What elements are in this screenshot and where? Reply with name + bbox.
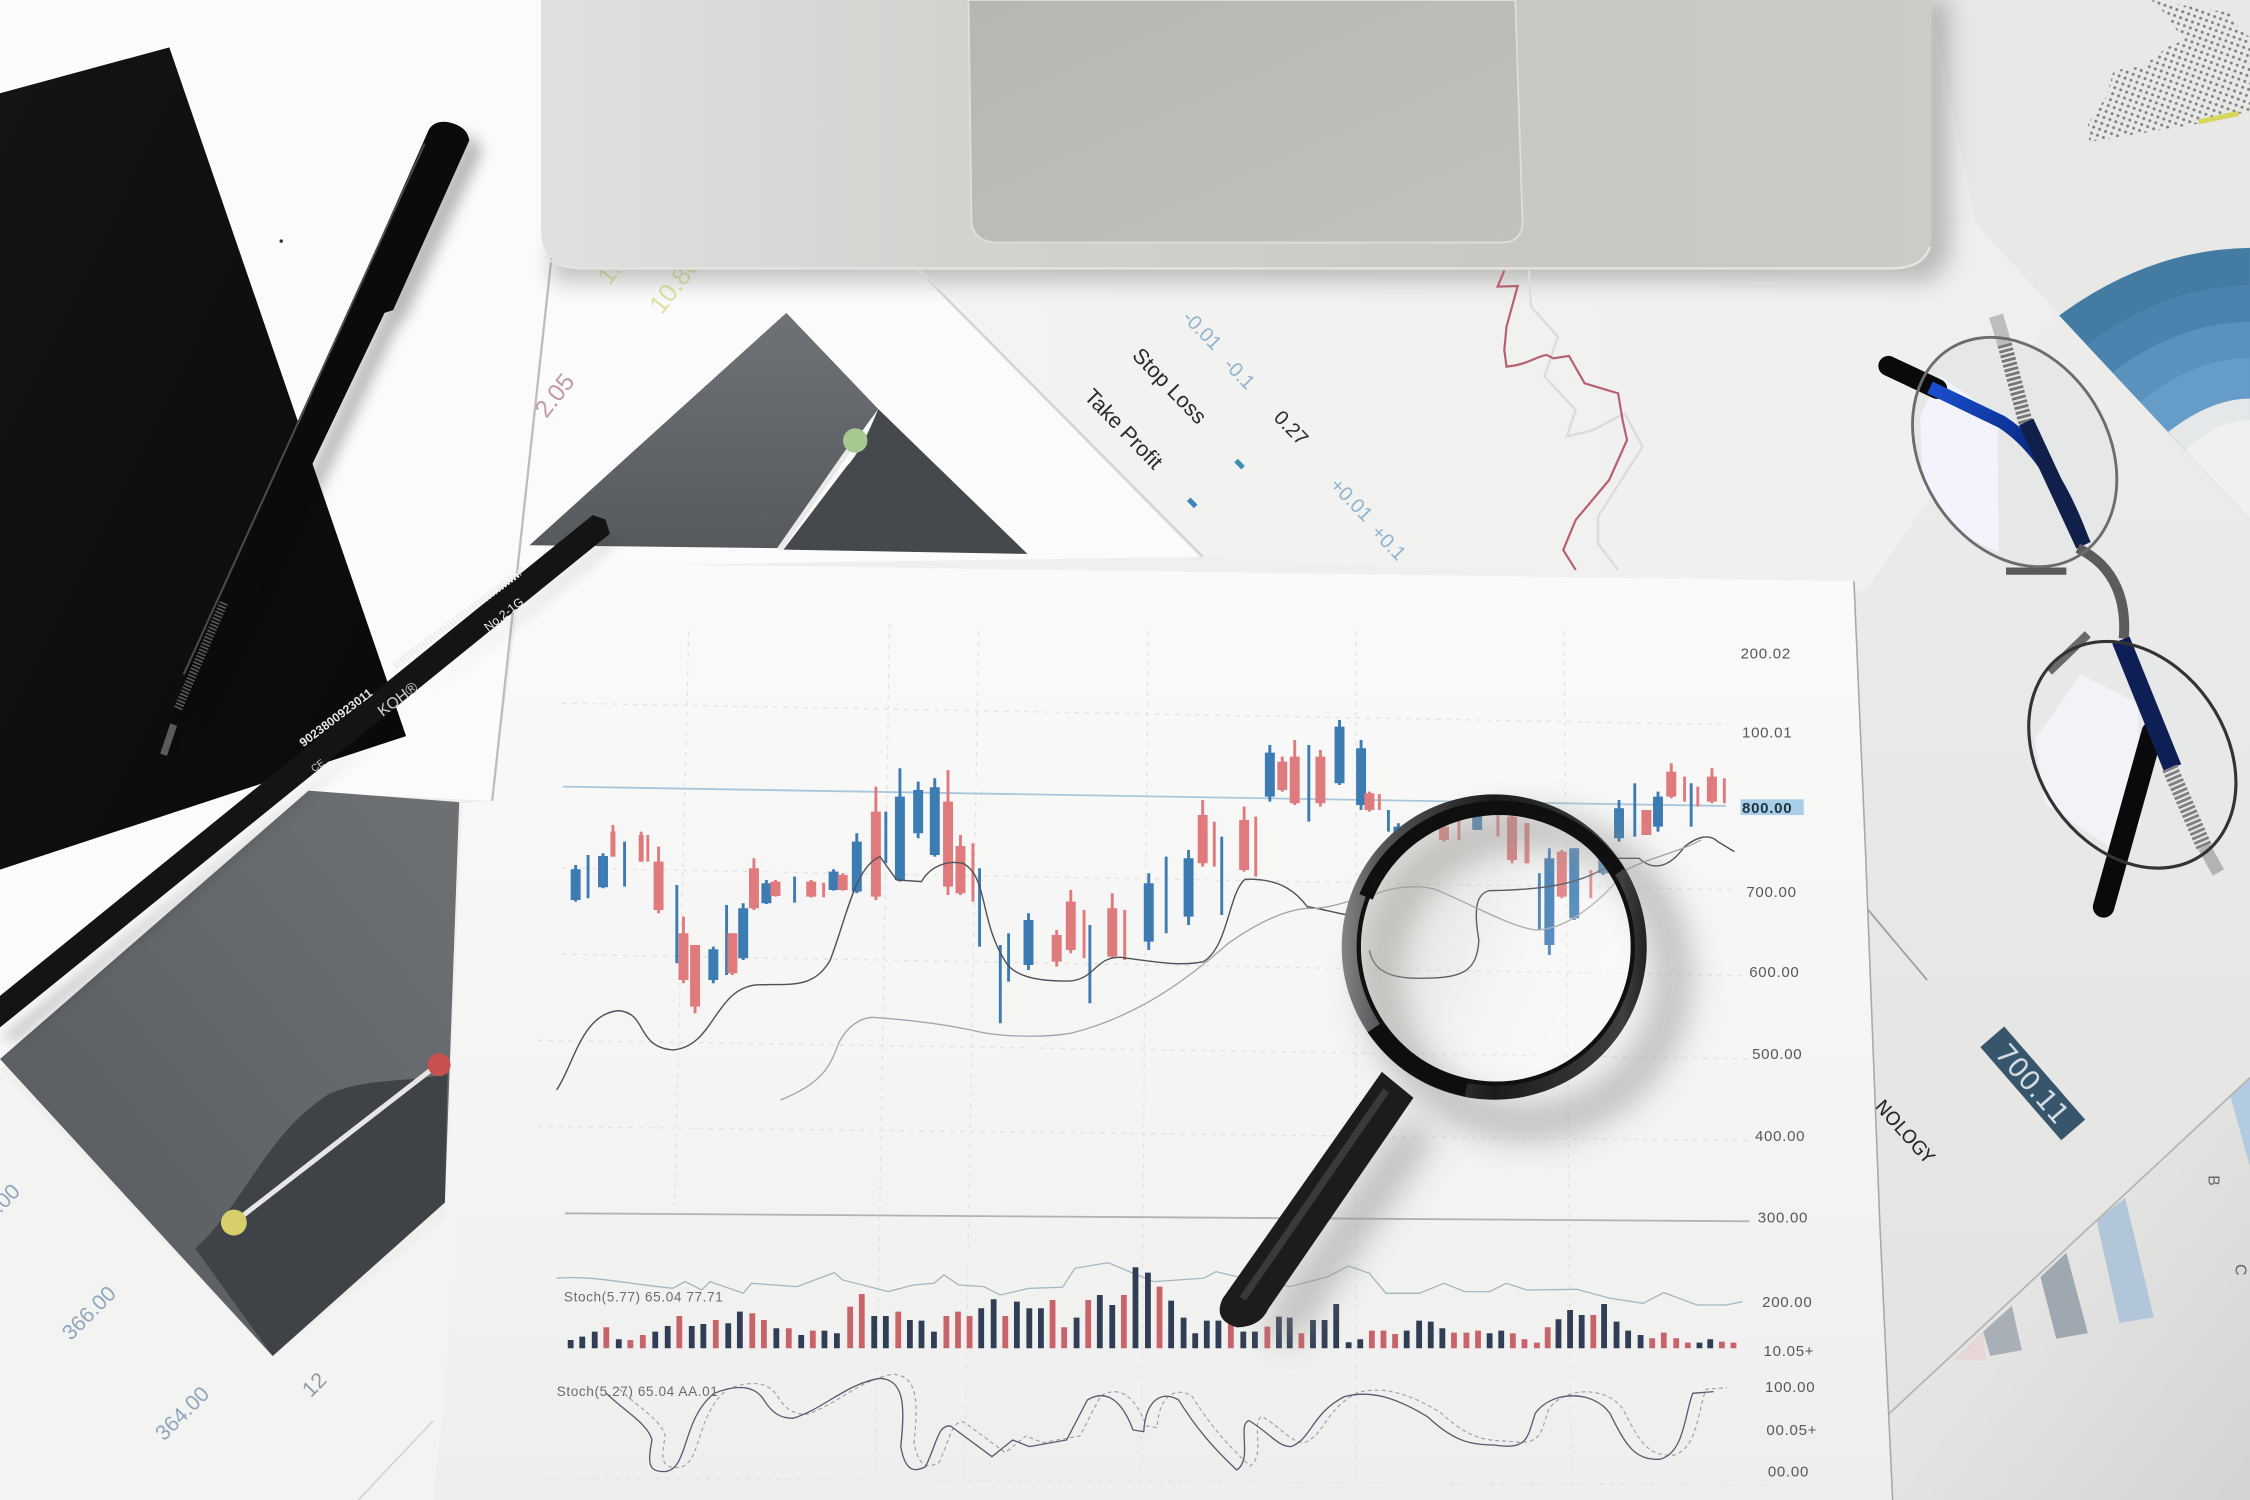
bars on lower right sheet: B: [2204, 1175, 2221, 1186]
lens bottom reflection: [2035, 674, 2141, 847]
pen: [159, 122, 482, 761]
pencil: [0, 515, 617, 1040]
resistance line: [563, 787, 1726, 806]
price axis labels: [1741, 646, 1817, 1481]
lower left sheet: 364.00: [151, 1382, 214, 1445]
price axis labels: 500.00: [1752, 1046, 1802, 1063]
red wicks: [613, 740, 1724, 1013]
ring base: [1342, 794, 1647, 1100]
decorative numbers near triangle: 2.05: [530, 369, 580, 423]
laptop: [541, 0, 1931, 270]
stop loss panel: +0.01: [1325, 474, 1376, 526]
price axis labels: 200.00: [1762, 1294, 1812, 1311]
price axis labels: 300.00: [1758, 1210, 1808, 1227]
price axis labels: 100.01: [1742, 725, 1792, 742]
pencil: No.2-1G: [481, 595, 526, 634]
pencil: 9023800923011: [297, 686, 375, 750]
decorative numbers near triangle: 1.1: [593, 246, 635, 290]
trackpad: [969, 0, 1522, 243]
decorative numbers near triangle: [530, 246, 706, 423]
label: 700.11: 700.11: [1989, 1038, 2075, 1131]
right temple: [1996, 316, 2005, 344]
black notebook: [0, 47, 406, 870]
price axis labels: 10.05+: [1764, 1343, 1814, 1360]
eyeglasses: [1871, 299, 2250, 908]
chart sheet: [433, 563, 1893, 1500]
paper: upper left sheet: [0, 0, 552, 1069]
price axis labels: 00.05+: [1766, 1422, 1817, 1439]
paper: lower right sheet: [1865, 1004, 2250, 1500]
stochastic solid: [606, 1378, 1714, 1472]
paper: stop loss sheet: [918, 224, 2056, 591]
stop loss panel: +0.1: [1367, 521, 1410, 565]
magnifier shadow: [1277, 829, 1673, 1335]
pencil: KOH®: [375, 679, 422, 720]
price axis labels: 600.00: [1749, 964, 1800, 981]
price axis labels: 700.00: [1746, 884, 1797, 901]
lens bottom: [1986, 601, 2250, 908]
stop loss panel: -0.1: [1219, 354, 1259, 394]
stop loss panel: [918, 270, 1410, 565]
collar: [1375, 1027, 1467, 1088]
dot pattern: [2088, 0, 2250, 142]
bars on lower right sheet: [1953, 1078, 2250, 1360]
blue wicks: [576, 720, 1691, 1023]
label: 700.11: [1979, 1026, 2085, 1141]
volume bars red: [606, 1287, 1733, 1348]
frames: [1871, 299, 2158, 605]
stoch label 1: Stoch(5.77) 65.04 77.71: [564, 1290, 723, 1305]
arcs: [2059, 248, 2250, 520]
handle: [1220, 1072, 1413, 1327]
hinge: [2078, 548, 2124, 639]
stop loss panel: -0.01: [1178, 307, 1225, 355]
moving average light: [780, 840, 1701, 1100]
lens top: [1871, 299, 2158, 605]
price axis labels: 00.00: [1768, 1464, 1809, 1481]
lower temple black: [2104, 732, 2152, 907]
paper: right sheet: [1851, 0, 2250, 1414]
yellow accent: [2198, 113, 2239, 122]
price axis labels: 100.00: [1765, 1379, 1815, 1396]
red bodies: [659, 757, 1712, 1007]
inner rim: [1359, 810, 1633, 1084]
dark triangle shape: [529, 313, 1027, 554]
magnifier: [1220, 794, 1647, 1327]
dark polygon shape lower left: [0, 791, 459, 1356]
laptop shadow: [552, 0, 1950, 281]
text: technology fragment: NOLOGY: [1870, 1096, 1938, 1169]
black top arc: [1366, 808, 1619, 897]
decorative numbers near triangle: 10.80: [644, 251, 706, 319]
current price tag: 800.00: [1742, 800, 1792, 817]
red price line: [1498, 271, 1643, 570]
lower left sheet: 12: [297, 1368, 331, 1402]
bars on lower right sheet: C: [2232, 1264, 2249, 1276]
price axis labels: 200.02: [1741, 646, 1791, 663]
pencil: CE: [309, 758, 327, 775]
nose pads: [2006, 569, 2066, 574]
paper: sheet with triangle: [517, 251, 1202, 567]
stoch label 2: Stoch(5.27) 65.04 AA.01: [557, 1384, 718, 1399]
chart grid: [538, 624, 1765, 1485]
stop loss panel: Stop Loss: [1127, 343, 1211, 429]
moving average dark: [557, 857, 1349, 1090]
blue bodies: [576, 727, 1658, 980]
lower left sheet: 366.00: [57, 1281, 121, 1345]
left temple: [1888, 366, 1937, 389]
stop loss panel: 0.27: [1269, 407, 1312, 450]
lower indicator panel: [557, 1213, 1749, 1472]
lens top reflection: [1920, 376, 1999, 552]
price axis labels: 400.00: [1755, 1128, 1805, 1145]
stop loss panel: Take Profit: [1079, 384, 1167, 474]
stochastic dashed: [620, 1374, 1727, 1468]
lower left sheet: [0, 1069, 462, 1500]
paper: upper right corner: [1930, 0, 2250, 519]
candlestick chart: [557, 720, 1734, 1100]
lens glass: [1357, 809, 1633, 1085]
volume bars navy: [571, 1267, 1710, 1348]
